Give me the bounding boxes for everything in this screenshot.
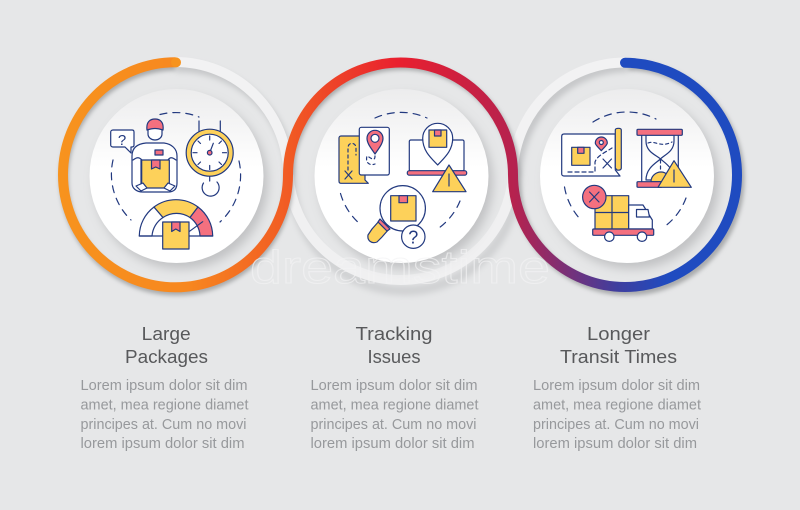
- body text: Lorem ipsum dolor sit dim: [310, 378, 478, 394]
- disc 2: [314, 89, 488, 263]
- body text: amet, mea regione diamet: [533, 398, 701, 414]
- icon: courier holding box: [132, 119, 177, 192]
- icon: question bubble: [111, 130, 134, 153]
- icon: magnifier over box: [368, 186, 425, 248]
- body text: lorem ipsum dolor sit dim: [80, 436, 244, 452]
- disc 3: [540, 89, 714, 263]
- body text: Lorem ipsum dolor sit dim: [533, 378, 700, 394]
- heading: Transit Times: [560, 346, 677, 367]
- body text: [310, 378, 478, 452]
- heading: Tracking: [356, 323, 432, 344]
- icon: dashed orbit 1: [111, 113, 241, 222]
- panel: large packages: [80, 89, 268, 452]
- panel: tracking issues: [310, 89, 493, 452]
- watermark: dreamstime: [250, 241, 550, 293]
- icon: weight gauge with box: [139, 200, 213, 249]
- body text: [533, 378, 701, 452]
- disc 1: [90, 89, 264, 263]
- icon: question bubble: ?: [118, 132, 126, 149]
- icon: map and location sheet: [339, 127, 389, 183]
- body text: [80, 378, 248, 452]
- icon: hourglass with warning: [637, 129, 691, 187]
- connected ring: three tangent loops with gradient line: [63, 57, 740, 291]
- heading: Packages: [125, 346, 208, 367]
- heading: Large: [142, 323, 191, 344]
- body text: principes at. Cum no movi: [310, 417, 476, 433]
- icon: dashed orbit 2: [340, 112, 460, 230]
- body text: lorem ipsum dolor sit dim: [310, 436, 474, 452]
- heading: [125, 323, 208, 367]
- heading: Issues: [368, 346, 420, 367]
- body text: amet, mea regione diamet: [310, 398, 478, 414]
- icon: delayed delivery truck: [583, 185, 654, 241]
- body text: Lorem ipsum dolor sit dim: [80, 378, 248, 394]
- heading: Longer: [587, 323, 650, 344]
- body text: principes at. Cum no movi: [80, 417, 246, 433]
- body text: lorem ipsum dolor sit dim: [533, 436, 697, 452]
- icon: hanging scale: [186, 121, 233, 196]
- heading: [356, 323, 432, 367]
- heading: [560, 323, 677, 367]
- icon: delivery map: [562, 128, 621, 176]
- icon: magnifier over box: ?: [408, 228, 418, 248]
- icon: dashed orbit 3: [564, 112, 686, 227]
- body text: principes at. Cum no movi: [533, 417, 699, 433]
- panel: longer transit times: [533, 89, 719, 452]
- icon: laptop with pin and warning: [407, 123, 467, 192]
- body text: amet, mea regione diamet: [80, 398, 248, 414]
